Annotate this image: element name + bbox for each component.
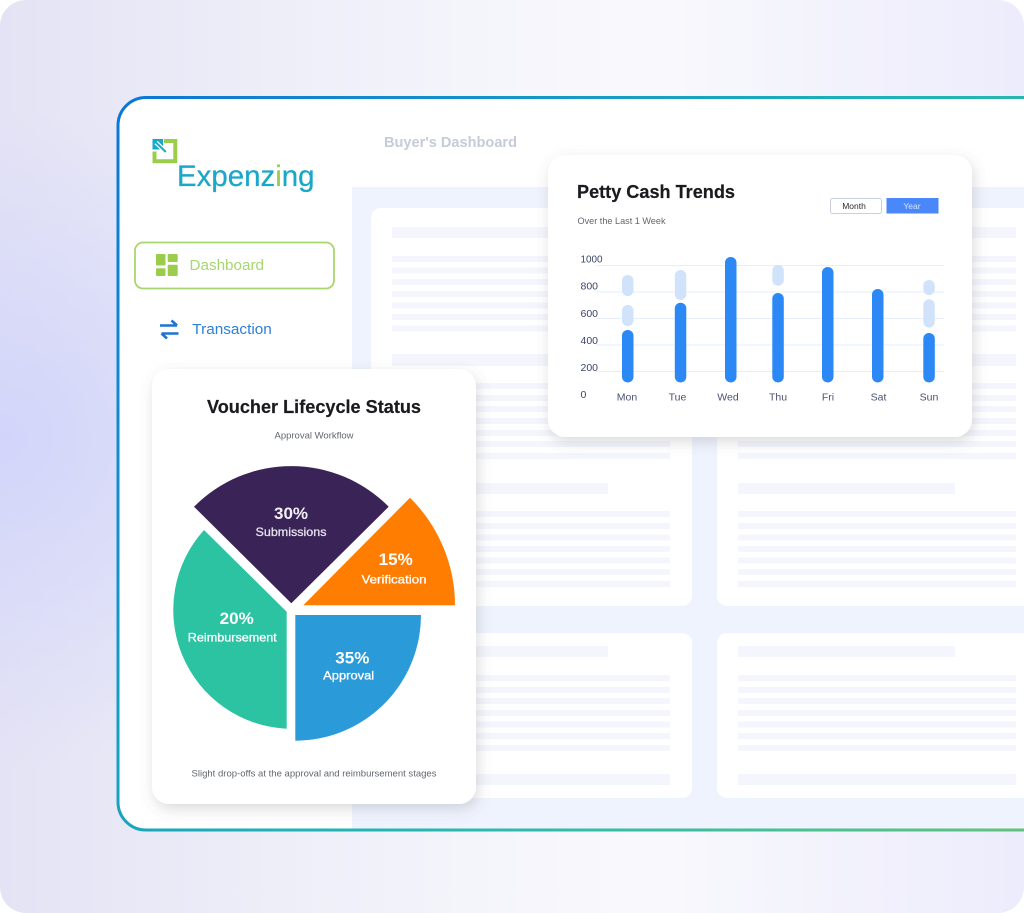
nav item: Transaction bbox=[160, 320, 272, 338]
x axis labels: Wed bbox=[717, 392, 739, 404]
slice: Approval 35%: 35% bbox=[335, 648, 369, 667]
slice: Verification 15% bbox=[303, 498, 455, 605]
slice: Approval 35%: Approval bbox=[323, 668, 374, 682]
x axis labels: Tue bbox=[669, 392, 687, 404]
y axis labels: 800 bbox=[580, 280, 598, 292]
slice: Submissions 30%: Submissions bbox=[256, 525, 326, 539]
nav item: Dashboard bbox=[135, 242, 334, 288]
y axis labels: 1000 bbox=[580, 254, 603, 266]
actual bars bbox=[622, 257, 935, 382]
slice: Verification 15%: Verification bbox=[362, 572, 426, 586]
heading: Buyer's Dashboard: Buyer's Dashboard bbox=[384, 135, 517, 151]
pie subtitle: Approval Workflow bbox=[274, 430, 354, 442]
x axis labels bbox=[617, 392, 938, 404]
slice: Reimbursement 20%: Reimbursement bbox=[188, 630, 277, 644]
icon: transfer arrows bbox=[160, 320, 178, 338]
x axis labels: Thu bbox=[769, 392, 787, 404]
pie chart bbox=[173, 466, 455, 741]
dashboard window frame bbox=[118, 98, 1024, 830]
y axis labels: 400 bbox=[580, 335, 598, 347]
x axis labels: Fri bbox=[822, 392, 834, 404]
logo: Expenzing bbox=[152, 138, 314, 193]
panel: Petty Cash Trends bbox=[548, 155, 972, 437]
icon: logo square with arrow bbox=[152, 138, 177, 163]
icon: dashboard grid bbox=[156, 254, 178, 276]
button: Year bbox=[886, 198, 938, 214]
button: Month: Month bbox=[842, 201, 866, 211]
pie title: Voucher Lifecycle Status bbox=[207, 397, 421, 417]
chart title: Petty Cash Trends bbox=[577, 182, 735, 202]
y axis labels bbox=[580, 254, 603, 401]
x axis labels: Sat bbox=[871, 392, 886, 404]
x axis labels: Sun bbox=[920, 392, 938, 404]
slice: Approval 35% bbox=[295, 615, 421, 741]
wordmark: Expenzing bbox=[177, 160, 314, 193]
y axis labels: 600 bbox=[580, 308, 598, 320]
pie caption: Slight drop-offs at the approval and reimbursement stages bbox=[192, 768, 437, 780]
label: Dashboard bbox=[190, 258, 264, 274]
bar chart bbox=[580, 254, 944, 404]
y axis labels: 0 bbox=[580, 389, 586, 401]
content area with placeholder cards bbox=[352, 187, 1024, 828]
slice: Submissions 30% bbox=[194, 466, 389, 603]
y axis labels: 200 bbox=[580, 362, 598, 374]
slice: Reimbursement 20%: 20% bbox=[220, 609, 254, 628]
label: Transaction bbox=[192, 322, 272, 338]
panel: Voucher Lifecycle Status bbox=[152, 369, 476, 804]
slice: Submissions 30%: 30% bbox=[274, 504, 308, 523]
target bars bbox=[622, 265, 935, 328]
x axis labels: Mon bbox=[617, 392, 637, 404]
button: Year: Year bbox=[903, 201, 921, 211]
chart subtitle: Over the Last 1 Week bbox=[578, 216, 666, 227]
slice: Verification 15%: 15% bbox=[379, 550, 413, 569]
button: Month bbox=[830, 198, 882, 214]
slice: Reimbursement 20% bbox=[173, 530, 287, 729]
